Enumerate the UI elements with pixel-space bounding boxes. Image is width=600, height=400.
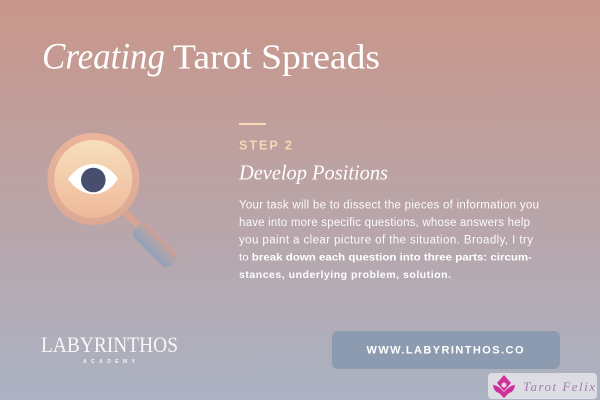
step label: STEP 2 bbox=[239, 138, 292, 152]
magnifier ring bbox=[47, 133, 139, 225]
website button: WWW.LABYRINTHOS.CO bbox=[366, 344, 524, 356]
subheading: Develop Positions bbox=[238, 160, 388, 184]
title: Tarot Spreads bbox=[173, 38, 380, 76]
watermark: Tarot Felix bbox=[488, 373, 597, 399]
title: Creating bbox=[42, 36, 165, 78]
body text: you paint a clear picture of the situation. Broadly, I try bbox=[239, 234, 533, 246]
watermark wordmark: Tarot Felix bbox=[523, 379, 595, 394]
eye white bbox=[68, 164, 118, 194]
website button bbox=[332, 331, 560, 369]
watermark lotus icon bbox=[493, 375, 515, 398]
logo: Labyrinthos Academy: ACADEMY bbox=[83, 359, 136, 365]
title bbox=[42, 36, 380, 78]
body text: Your task will be to dissect the pieces of information you bbox=[239, 200, 539, 212]
icon: magnifying glass with eye bbox=[47, 133, 180, 270]
body text: have into more specific questions, whose answers help bbox=[239, 217, 530, 229]
magnifier lens bbox=[54, 140, 132, 218]
body text: stances, underlying problem, solution. bbox=[239, 269, 451, 281]
magnifier handle neck bbox=[123, 210, 144, 231]
logo: Labyrinthos Academy: LABYRINTHOS bbox=[41, 332, 178, 357]
body text bbox=[239, 200, 539, 281]
accent line bbox=[239, 123, 266, 125]
body text: to break down each question into three parts: circum- bbox=[239, 252, 533, 264]
logo: Labyrinthos Academy bbox=[41, 332, 178, 365]
magnifier grip bbox=[130, 220, 180, 270]
eye pupil bbox=[81, 168, 106, 192]
